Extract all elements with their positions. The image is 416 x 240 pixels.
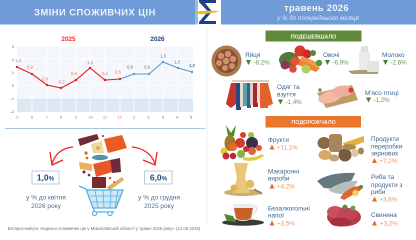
value labels 2025: 0,9	[27, 64, 34, 70]
item: fish and fish products: Риба та	[371, 173, 395, 181]
callout: december change	[138, 171, 180, 210]
data points	[16, 66, 121, 89]
header: right period band	[221, 0, 416, 24]
item: poultry meat	[317, 85, 399, 108]
y axis labels: 2	[12, 57, 15, 62]
caption: у % до грудня	[138, 194, 180, 202]
item: cereal products: Продукти	[371, 136, 399, 143]
year label 2025: 2025	[61, 36, 76, 43]
y axis labels: -2	[10, 109, 15, 114]
x axis months: 9	[75, 114, 78, 120]
item: cereal products	[318, 134, 403, 165]
value labels 2025: 0,0	[42, 76, 49, 82]
item: clothes and shoes: взуття	[277, 92, 296, 98]
value labels 2025: 1,4	[15, 58, 22, 63]
item: pork: +3,2%	[380, 220, 398, 228]
item: fish and fish products: риби	[371, 188, 386, 196]
x axis months: 8	[60, 114, 63, 120]
x axis months: 3	[162, 114, 165, 120]
x axis months: 7	[46, 114, 49, 120]
year label 2026: 2026	[150, 36, 165, 43]
item: clothes and shoes	[226, 81, 302, 110]
callout: december change: 2025 року	[144, 203, 175, 210]
arrow: right red	[132, 147, 157, 165]
y axis labels	[10, 44, 15, 114]
item: clothes and shoes: Одяг та	[277, 84, 300, 91]
x axis months: 5	[190, 114, 193, 120]
item: macaroni products: вироби	[268, 174, 290, 182]
x axis months: 10	[88, 114, 93, 120]
period subheading: у % до попереднього місяця	[276, 15, 360, 22]
x axis months: 5	[16, 114, 19, 120]
item: pork	[327, 205, 398, 228]
banner: decreased	[266, 30, 362, 42]
caption: у % до квітня	[26, 194, 66, 202]
item: vegetables: Овочі	[323, 51, 339, 59]
value labels 2025: 1,3	[87, 60, 94, 65]
value labels 2025	[15, 58, 122, 84]
item: fish and fish products: продукти з	[371, 182, 402, 189]
item: clothes and shoes: -1,4%	[286, 99, 302, 106]
item: soft drinks	[222, 204, 310, 228]
x axis months: 12	[117, 114, 122, 120]
line 2026	[120, 62, 192, 79]
value labels 2026: 0,9	[127, 64, 134, 70]
item: fish and fish products: +3,6%	[380, 196, 398, 204]
illustration: shopping cart with falling goods	[78, 134, 127, 216]
footnote: Експрес-випуск «Індекси споживчих цін у Миколаївській області у травні 2026 року» (12.06.2026)	[8, 226, 201, 231]
value labels 2025: 0,4	[71, 71, 78, 76]
y axis labels: 0	[12, 83, 15, 88]
item: pork: Свинина	[371, 212, 397, 219]
item: fruits	[220, 125, 298, 161]
item: milk	[348, 46, 407, 74]
item: vegetables: -6,9%	[332, 60, 349, 66]
x axis months: 11	[103, 114, 108, 120]
x axis months: 6	[31, 114, 34, 120]
callout: month change: 1,0%	[37, 172, 55, 182]
item: eggs: -8,2%	[254, 60, 270, 66]
arrow: left red	[50, 147, 73, 165]
value labels 2026: 1,0	[189, 63, 196, 68]
banner: increased: ПОДОРОЖЧАЛО	[291, 120, 336, 126]
x axis months: 1	[133, 114, 136, 120]
item: fruits: Фрукти	[268, 137, 289, 144]
item: soft drinks: +3,5%	[277, 220, 295, 228]
value labels 2026: 1,8	[160, 54, 167, 58]
item: macaroni products: +4,2%	[277, 184, 295, 190]
item: poultry meat: -1,2%	[374, 97, 390, 104]
item: fish and fish products	[317, 173, 402, 204]
title: ЗМІНИ СПОЖИВЧИХ ЦІН	[34, 8, 156, 18]
y axis labels: 3	[12, 44, 15, 49]
item: fruits: +11,1%	[277, 144, 298, 152]
callout: month change	[26, 171, 66, 210]
value labels 2026: 1,3	[174, 60, 181, 64]
value labels 2025: -0,2	[57, 80, 65, 84]
callout: month change: 2026 року	[31, 203, 62, 210]
item: cereal products: +7,2%	[380, 158, 398, 165]
logo	[195, 0, 220, 24]
item: cereal products: переробки	[371, 142, 403, 150]
x axis months: 4	[176, 114, 179, 120]
value labels 2025: 0,5	[115, 70, 122, 74]
banner: increased	[266, 116, 361, 128]
line 2025	[17, 67, 120, 88]
y axis labels: -1	[10, 96, 15, 101]
value labels 2026	[127, 54, 196, 70]
data points 2026	[133, 61, 193, 75]
period heading: травень 2026	[284, 2, 349, 13]
item: cereal products: зернових	[371, 150, 399, 158]
item: eggs: Яйця	[245, 51, 261, 59]
item: milk: -2,6%	[390, 60, 407, 66]
header: left title band	[0, 0, 195, 24]
item: soft drinks: напої	[268, 212, 284, 220]
item: eggs	[212, 46, 270, 76]
item: milk: Молоко	[382, 52, 405, 59]
callout: december change: 6,0%	[150, 172, 168, 182]
item: macaroni products	[224, 163, 299, 196]
item: vegetables	[279, 46, 349, 74]
x axis months	[16, 114, 193, 120]
item: macaroni products: Макаронні	[268, 168, 299, 176]
item: soft drinks: Безалкогольні	[268, 204, 310, 212]
banner: decreased: ПОДЕШЕВШАЛО	[291, 34, 336, 40]
value labels 2026: 0,9	[144, 64, 151, 70]
line chart	[10, 36, 196, 120]
y axis labels: 1	[12, 70, 15, 75]
item: poultry meat: М'ясо птиці	[365, 89, 399, 97]
value labels 2025: 0,4	[102, 71, 109, 76]
x axis months: 2	[147, 114, 150, 120]
